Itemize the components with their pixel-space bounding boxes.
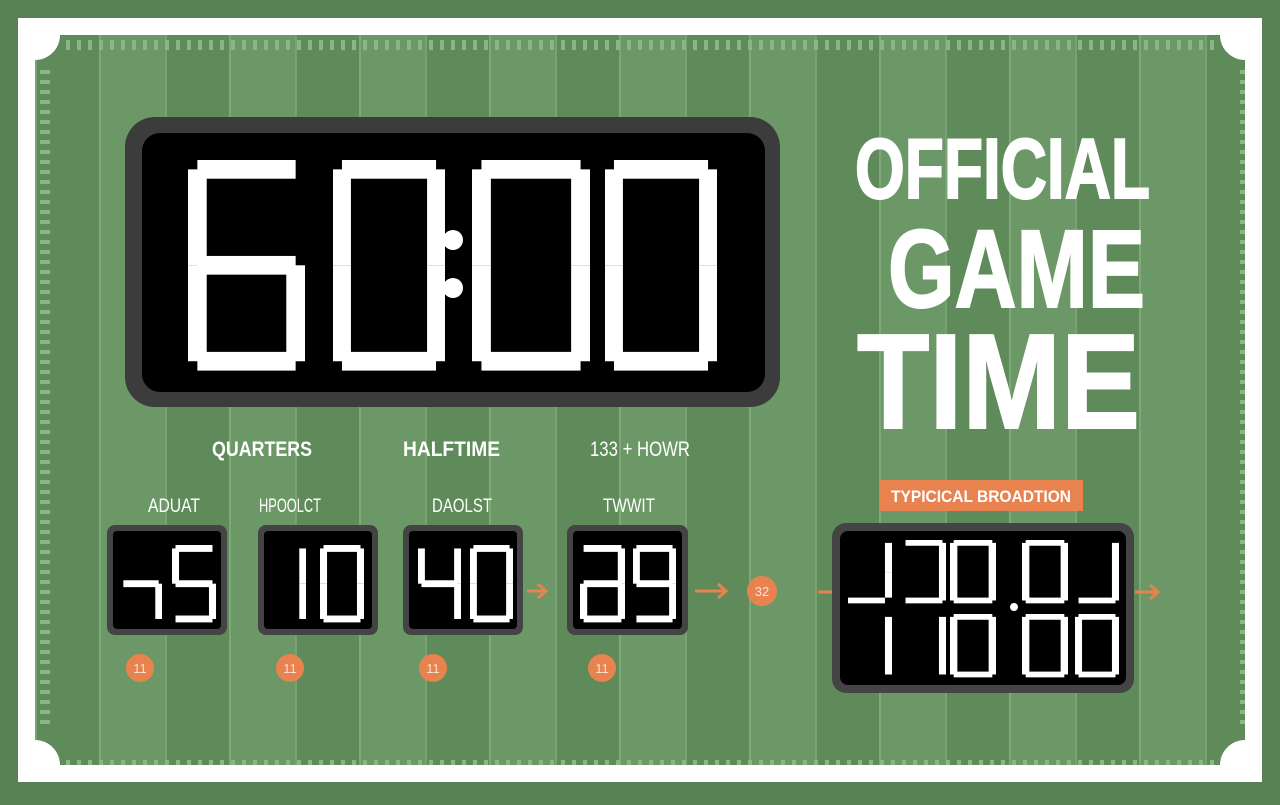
main clock display 60:00 [125,117,780,407]
broadcast label [880,480,1083,511]
badge 32: 32 [755,584,769,599]
small display 4 [567,525,688,635]
arrows [527,584,1158,599]
number badges: 11 [426,661,440,676]
sub labels: ADUAT [148,496,200,517]
small display 1 [107,525,227,635]
number badges: 11 [595,661,609,676]
sub labels: TWWIT [603,496,655,517]
sub labels: HPOOLCT [259,496,321,517]
title: TIME [857,306,1140,457]
title: OFFICIAL [855,122,1150,217]
broadcast label: TYPICICAL BROADTION [891,487,1071,506]
small display 2 [258,525,378,635]
section labels: HALFTIME [403,438,500,461]
section labels [212,438,690,461]
number badges [126,654,616,682]
number badges: 11 [133,661,147,676]
section labels: QUARTERS [212,438,312,461]
broadcast display [832,523,1134,693]
title [855,122,1150,457]
sub labels: DAOLST [432,496,492,517]
number badges: 11 [283,661,297,676]
badge 32 [747,576,777,606]
section labels: 133 + HOWR [590,438,690,461]
sub labels [148,496,655,517]
small display 3 [403,525,523,635]
title: GAME [888,208,1145,331]
